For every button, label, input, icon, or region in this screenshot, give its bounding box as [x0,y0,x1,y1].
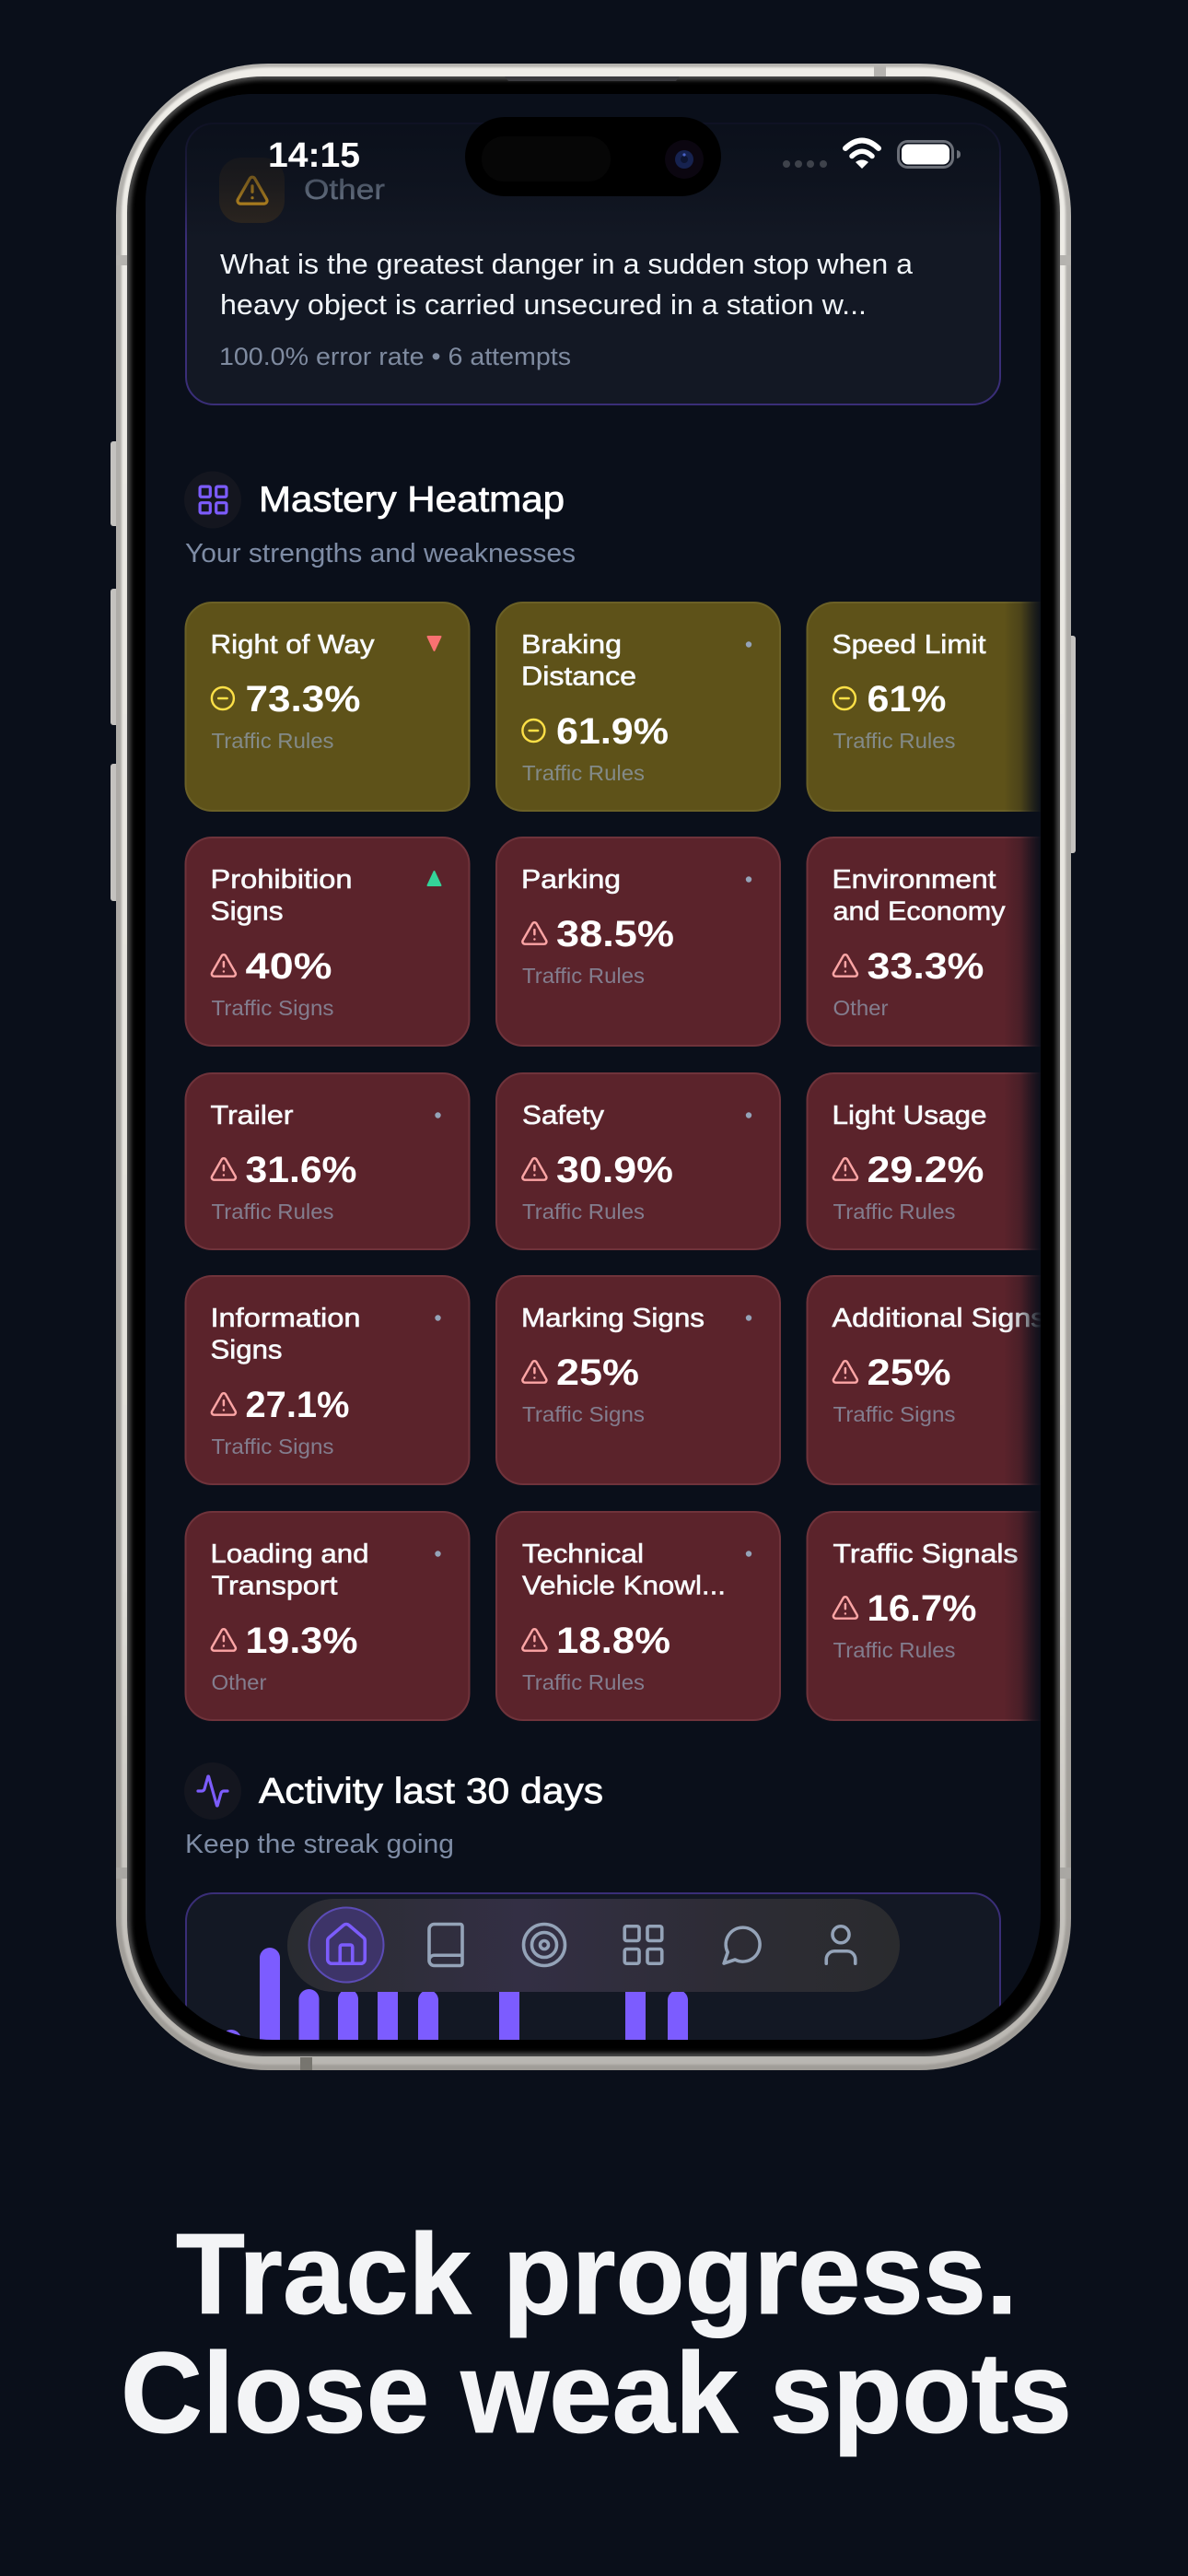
card: Traffic Signals: Traffic Signals [833,1540,1019,1569]
icon: wifi [845,140,879,169]
dynamic island [465,117,721,196]
card: Trailer [186,1073,470,1249]
card: Technical Vehicle Knowledge: 18.8% [556,1621,670,1661]
question text [220,248,914,321]
status bar time: 14:15 [268,136,360,175]
card: Additional Signs: Traffic Signs [833,1402,956,1426]
card: Right of Way [186,603,470,811]
card: Traffic Signals [807,1511,1039,1721]
card: Marking Signs: 25% [556,1352,639,1393]
icon: battery [899,142,961,168]
card: Marking Signs [496,1276,780,1484]
panel: weak question card [186,123,1000,404]
headline: Track progress. [176,2211,1018,2338]
card: Prohibition Signs: Prohibition [210,865,352,895]
icon: grid [624,1926,662,1963]
card: Information Signs [186,1276,470,1484]
card: Traffic Signals: 16.7% [868,1588,976,1629]
heatmap grid [186,603,1090,1720]
phone side buttons [111,441,1076,901]
card: Loading and Transport [186,1512,470,1720]
card: Parking: 38.5% [556,914,674,954]
card: Braking Distance: Braking [521,630,622,660]
card: Loading and Transport: Other [212,1670,267,1694]
headline: Close weak spots [121,2330,1072,2457]
card: Speed Limit [807,602,1039,812]
panel: activity chart [185,1892,1001,2040]
bottom navigation pill [287,1899,900,1992]
phone frame [116,64,1071,2070]
subtitle: heatmap: Your strengths and weaknesses [185,539,576,568]
card: Safety: 30.9% [556,1150,673,1190]
card: Loading and Transport: Transport [212,1572,337,1601]
card: Right of Way: 73.3% [245,679,361,720]
card: Braking Distance [496,603,780,811]
card: Additional Signs: Additional Signs [833,1304,1046,1333]
card: Braking Distance: 61.9% [556,711,669,752]
card: Prohibition Signs [186,837,470,1046]
card: Prohibition Signs: Traffic Signs [212,996,333,1020]
card: Environment and Economy: Other [833,996,889,1020]
card: Light Usage: 29.2% [868,1150,984,1190]
heading: Mastery Heatmap: Mastery Heatmap [259,480,565,520]
card: Right of Way: Right of Way [210,630,375,660]
card: Marking Signs: Traffic Signs [522,1402,645,1426]
card: Parking [496,837,780,1046]
card: Speed Limit: Speed Limit [833,630,985,660]
bar chart [227,1948,688,2040]
card: Environment and Economy: 33.3% [868,946,984,987]
icon: book [429,1924,462,1966]
status bar cellular dots [783,160,827,168]
card: Information Signs: 27.1% [245,1385,350,1425]
card: Light Usage: Traffic Rules [833,1200,956,1224]
icon: home active [309,1907,383,1983]
card: Braking Distance: Traffic Rules [522,761,645,785]
card: Right of Way: Traffic Rules [212,729,333,753]
card: Environment and Economy: Environment [833,865,996,895]
card: Speed Limit: 61% [868,679,947,720]
card: Prohibition Signs: 40% [245,946,332,987]
card: Prohibition Signs: Signs [210,897,284,927]
card: Speed Limit: Traffic Rules [833,729,956,753]
question text: heavy object is carried unsecured in a station w... [220,288,867,321]
card: Safety [496,1073,780,1249]
phone screen [146,94,1090,2133]
card: Light Usage [807,1072,1039,1250]
card: Additional Signs: 25% [868,1352,950,1393]
heading: Mastery Heatmap [184,472,565,529]
card: Safety: Traffic Rules [522,1200,645,1224]
card: Technical Vehicle Knowledge: Traffic Rules [522,1670,645,1694]
card: Light Usage: Light Usage [833,1101,986,1130]
card: Safety: Safety [522,1101,605,1130]
question text: What is the greatest danger in a sudden stop when a [220,248,914,280]
card: Trailer: Traffic Rules [212,1200,333,1224]
card: Traffic Signals: Traffic Rules [833,1638,956,1662]
card: Parking: Traffic Rules [522,964,645,988]
icon: target [523,1924,565,1966]
card: Braking Distance: Distance [521,662,636,691]
icon: chat [724,1927,760,1963]
card: Parking: Parking [521,865,621,895]
icon: person [826,1926,856,1963]
card: Loading and Transport: Loading and [210,1540,368,1569]
card: Environment and Economy [807,837,1039,1047]
card: Trailer: Trailer [210,1101,294,1130]
card: Marking Signs: Marking Signs [521,1304,705,1333]
card: Additional Signs [807,1275,1041,1485]
card: Environment and Economy: and Economy [833,897,1006,927]
category label: Other [304,173,385,205]
card: Information Signs: Information [210,1304,361,1333]
card: Trailer: 31.6% [245,1150,357,1190]
error rate meta: 100.0% error rate • 6 attempts [219,343,571,370]
card: Technical Vehicle Knowledge: Technical [522,1540,644,1569]
heading: Activity last 30 days: Activity last 30 days [259,1772,603,1811]
subtitle: activity: Keep the streak going [185,1830,454,1859]
icon: warning tile [219,158,285,223]
card: Technical Vehicle Knowledge [496,1512,780,1720]
card: Information Signs: Signs [210,1336,282,1365]
headline [121,2211,1072,2457]
heading: Activity last 30 days [184,1762,603,1820]
card: Loading and Transport: 19.3% [245,1621,357,1661]
card: Information Signs: Traffic Signs [212,1434,333,1458]
card: Technical Vehicle Knowledge: Vehicle Knowl... [522,1572,726,1601]
